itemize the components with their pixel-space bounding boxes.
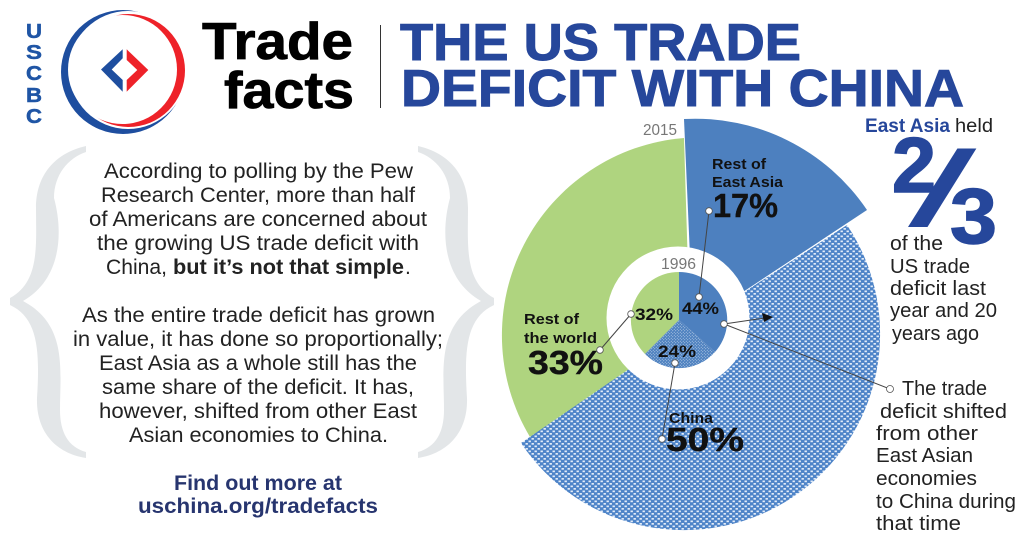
callout: trade deficit shifted: economies [876,468,977,490]
label: rest of the world 33% [524,311,603,381]
text block: introduction: . [405,256,411,279]
callout: trade deficit shifted: The trade [902,378,987,400]
callout: trade deficit shifted [876,378,1016,535]
label: China 50% [666,410,744,458]
label: rest of the world 33%: the world [524,330,597,347]
text block: explanation: As the entire trade deficit has grown [82,304,435,327]
call to action [138,472,378,518]
text block: explanation [73,304,443,447]
label: rest of East Asia 17%: Rest of [712,156,767,173]
label: inner 32%: 32% [635,305,673,324]
callout: East Asia held two thirds: held [955,116,993,137]
text block: explanation: East Asia as a whole still has the [99,352,417,375]
callout: trade deficit shifted: deficit shifted [880,401,1007,423]
big fraction 2/3 [892,121,997,260]
text block: introduction [89,160,427,279]
big fraction 2/3: 2 [892,121,936,209]
label: inner 24%: 24% [658,342,696,361]
text block: explanation: however, shifted from other East [99,400,417,423]
text block: explanation: in value, it has done so proportionally; [73,328,443,351]
callout: East Asia held two thirds: US trade [890,256,970,278]
chart: nested pie charts 2015 and 1996 [502,119,880,530]
label: China 50%: 50% [666,421,744,458]
logo: USCBC vertical wordmark: C [26,63,42,85]
inner slice: rest of the world [631,272,679,354]
label: rest of the world 33%: 33% [528,344,603,381]
title: THE US TRADE [400,14,801,72]
title [400,14,964,118]
callout: trade deficit shifted: from other [876,423,978,445]
text block: explanation: Asian economies to China. [129,424,388,447]
left curly brace [10,146,86,458]
year label 2015: 2015 [643,122,677,139]
outer slice: rest of East Asia [684,119,867,325]
callout: East Asia held two thirds: deficit last [890,278,986,300]
logo: USCBC vertical wordmark: S [26,42,42,64]
callout: East Asia held two thirds: East Asia [865,116,950,137]
year label 1996: 1996 [661,256,696,273]
title: DEFICIT WITH CHINA [401,60,964,118]
inner slice: China [645,320,715,368]
logo: USCBC vertical wordmark: C [26,106,42,128]
label: rest of East Asia 17%: East Asia [712,174,784,191]
text block: introduction: China, [106,256,167,279]
callout: trade deficit shifted: East Asian [876,445,973,467]
callout: East Asia held two thirds: of the [890,233,943,255]
text block: introduction: but it’s not that simple [173,256,404,279]
callout: East Asia held two thirds: year and 20 [890,300,997,322]
leader line: shift callout [721,321,894,392]
leader line: 33% to 32% [597,311,634,353]
leader line: 50% to 24% [659,360,678,442]
text block: introduction: According to polling by the Pew [104,160,414,183]
label: China 50%: China [669,410,714,427]
outer slice: rest of the world [502,138,690,437]
label: rest of East Asia 17%: 17% [713,187,778,224]
label: rest of the world 33%: Rest of [524,311,580,328]
inner ring [606,246,750,390]
heading: Trade facts: Trade [202,13,353,71]
call to action: uschina.org/tradefacts [138,495,378,518]
inner slice: rest of East Asia [679,272,727,352]
logo: circular emblem [61,10,187,134]
label: inner 44%: 44% [682,299,719,318]
logo: USCBC vertical wordmark: B [26,85,42,107]
text block: introduction: Research Center, more than half [101,184,415,207]
callout: East Asia held two thirds: years ago [892,323,979,345]
text block: introduction: the growing US trade deficit with [97,232,419,255]
big fraction 2/3: 3 [950,172,997,260]
logo: USCBC vertical wordmark [26,21,42,128]
heading: Trade facts: facts [224,62,354,120]
arrow: shift of share [724,313,773,324]
outer slice: China [521,225,880,530]
label: rest of East Asia 17% [712,156,784,224]
logo: USCBC vertical wordmark: U [26,21,42,43]
big fraction 2/3: / [908,130,977,249]
callout: trade deficit shifted: to China during [876,491,1016,513]
callout: East Asia held two thirds [865,116,997,345]
heading: Trade facts [202,13,354,120]
right curly brace [418,146,494,458]
callout: trade deficit shifted: that time [876,513,961,535]
text block: introduction: of Americans are concerned about [89,208,427,231]
leader line: 17% to 44% [696,208,712,300]
call to action: Find out more at [174,472,342,495]
text block: explanation: same share of the deficit. It has, [102,376,414,399]
